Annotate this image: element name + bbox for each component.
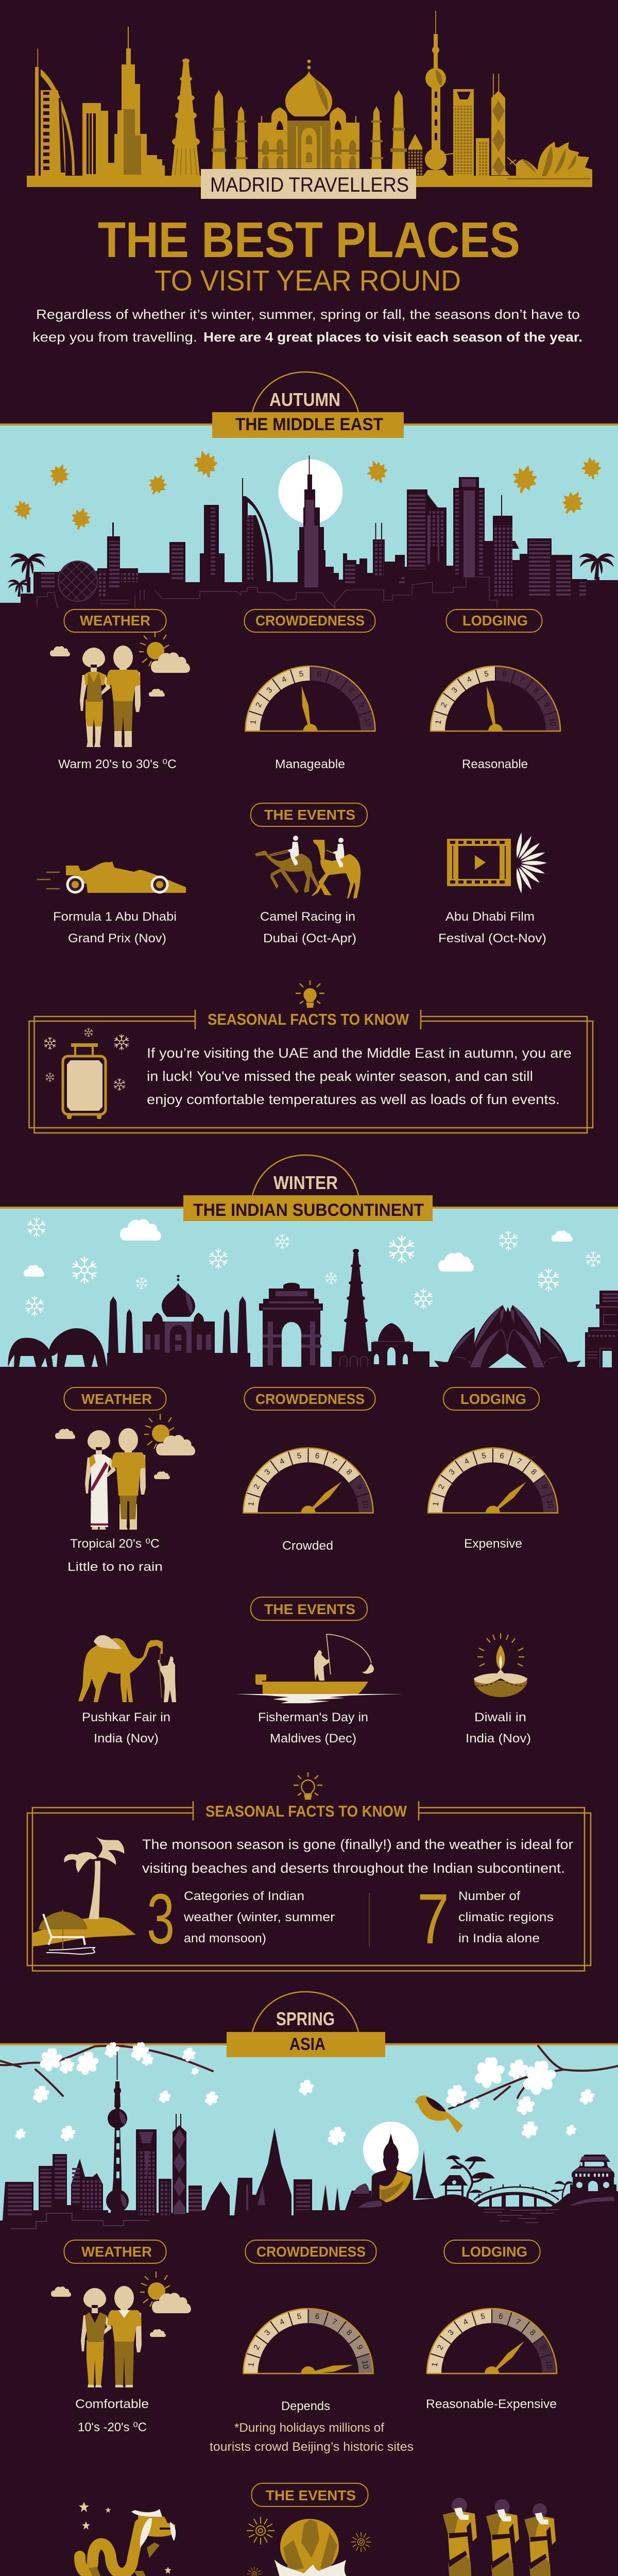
gauge: crowdedness 8: 7: [331, 1456, 338, 1466]
paragraph: enjoy comfortable temperatures as well as loads of fun events.: [147, 1092, 560, 1107]
caption: pushkar: [82, 1710, 170, 1745]
icon: camel racing: [255, 836, 360, 899]
icon: suitcase and snowflakes: [43, 1028, 130, 1119]
stat: 3 categories: Categories of Indian: [184, 1889, 304, 1903]
gauge: lodging 8: 6: [499, 1451, 505, 1461]
caption: film festival: Abu Dhabi Film: [445, 910, 535, 924]
region banner: asia: ASIA: [289, 2035, 325, 2054]
gauge: lodging 8: 2: [437, 1483, 447, 1490]
header skyline: [27, 11, 592, 187]
section: winter: [0, 1154, 618, 1972]
gauge: lodging reasonable to expensive: 10: [544, 2360, 554, 2369]
caption: crowdedness: [210, 2399, 414, 2454]
gauge: lodging reasonable to expensive: 9: [538, 2344, 548, 2351]
caption: diwali: Diwali in: [474, 1710, 526, 1724]
gauge: lodging 5: 7: [518, 675, 525, 685]
landmark: twin slab tower: [82, 103, 114, 176]
season arc: winter: [252, 1155, 358, 1195]
icon: lightbulb outline: [294, 1772, 322, 1799]
gauge: lodging reasonable to expensive: 7: [514, 2317, 522, 2327]
section: autumn: [0, 372, 618, 1133]
caption: diwali: [466, 1710, 531, 1745]
landmark: Taj Mahal minarets: [212, 90, 407, 170]
season arc: autumn: AUTUMN: [269, 389, 340, 410]
landmark: dark Taj Mahal: [107, 1275, 250, 1367]
landmark: lotus temple: [434, 1305, 581, 1368]
gauge: lodging 8: 10: [545, 1499, 555, 1509]
gauge: lodging 8: 7: [515, 1456, 523, 1466]
caption: formula 1: Grand Prix (Nov): [68, 931, 166, 945]
icon: lotus lantern: [247, 2517, 371, 2576]
caption: weather: [67, 1537, 163, 1574]
gauge: lodging 5: 4: [466, 675, 473, 685]
gauge: lodging 5: 2: [439, 701, 449, 709]
caption: formula 1: [53, 910, 177, 945]
caption: fishermans day: Fisherman's Day in: [258, 1710, 368, 1724]
gauge: crowdedness 5: 3: [265, 686, 274, 695]
caption: weather: [75, 2397, 149, 2434]
caption: crowdedness: Manageable: [275, 757, 345, 771]
icon: three monks: [443, 2498, 556, 2576]
icon: golden bird: [415, 2095, 463, 2133]
icon: formula 1 car: [37, 861, 186, 893]
gauge: lodging 5: [431, 666, 560, 731]
gauge: crowdedness 8: 10: [360, 1499, 370, 1509]
pill: weather: WEATHER: [81, 1391, 152, 1407]
animals: elephants: [8, 1328, 107, 1367]
panel: seasonal facts winter: [27, 1801, 591, 1971]
caption: pushkar: Pushkar Fair in: [82, 1710, 170, 1724]
caption: weather: Tropical 20's ⁰C: [70, 1537, 160, 1551]
gauge: lodging reasonable to expensive: 6: [498, 2312, 504, 2321]
gauge: crowdedness 5: 5: [299, 669, 304, 679]
gauge: lodging reasonable to expensive: [427, 2309, 557, 2374]
landmark: Qutub Minar: [171, 59, 200, 176]
gauge: lodging reasonable to expensive: 3: [447, 2328, 456, 2337]
gauge: crowdedness 8: 9: [355, 1483, 365, 1490]
gauge: crowdedness depends: 3: [263, 2328, 272, 2337]
gauge: lodging reasonable to expensive: 4: [462, 2317, 470, 2327]
caption: diwali: India (Nov): [466, 1732, 531, 1745]
caption: film festival: Festival (Oct-Nov): [438, 931, 546, 945]
gauge: lodging 5: 5: [484, 669, 489, 679]
branches with blossoms: [0, 2042, 618, 2115]
title: [98, 212, 520, 297]
caption: weather: Comfortable: [75, 2397, 149, 2411]
gauge: lodging 8: [428, 1448, 558, 1513]
gauge: lodging 8: 5: [481, 1451, 487, 1461]
skyline: middle east: [0, 455, 618, 618]
caption: camel racing: Dubai (Oct-Apr): [263, 931, 356, 945]
stat: 7 climatic regions: Number of: [458, 1889, 520, 1903]
title: TO VISIT YEAR ROUND: [154, 264, 461, 297]
header and autumn section: [0, 11, 618, 1133]
caption: crowdedness: *During holidays millions of: [234, 2421, 384, 2435]
gauge: crowdedness 8: 4: [278, 1456, 286, 1466]
brand banner: [201, 169, 416, 199]
section: spring: [0, 1991, 618, 2576]
caption: weather: Little to no rain: [67, 1560, 163, 1574]
caption: crowdedness: Depends: [281, 2399, 330, 2413]
gauge: crowdedness 8: 5: [297, 1451, 302, 1461]
gauge: lodging 8: 9: [539, 1483, 549, 1490]
falling petals: [15, 2080, 594, 2145]
region banner: asia: [227, 2032, 385, 2057]
pill: weather: [64, 1387, 166, 1410]
gauge: lodging reasonable to expensive: 8: [528, 2328, 537, 2337]
gauge: crowdedness depends: 5: [297, 2312, 302, 2321]
pill: crowdedness: [244, 609, 375, 632]
gauge: crowdedness 8: 3: [263, 1467, 272, 1477]
landmark: Shanghai towers: [408, 11, 518, 176]
landmark: Taj Mahal: [258, 60, 359, 168]
gauge: lodging 5: 3: [450, 686, 459, 695]
caption: crowdedness: Crowded: [282, 1539, 333, 1553]
gauge: crowdedness 5: 4: [280, 675, 288, 685]
pill: crowdedness: [244, 1387, 375, 1410]
caption: lodging: Reasonable-Expensive: [426, 2397, 557, 2411]
region banner: the middle east: THE MIDDLE EAST: [235, 415, 383, 434]
gauge: lodging 5: 1: [434, 719, 443, 725]
gauge: crowdedness 5: 6: [317, 669, 322, 679]
pill: the events: [251, 2483, 368, 2506]
icon: couple in comfortable weather: [51, 2272, 191, 2387]
stat: 3 categories: and monsoon): [184, 1931, 266, 1945]
landmark: Burj Al Arab: [35, 48, 75, 176]
paragraph: visiting beaches and deserts throughout the Indian subcontinent.: [142, 1860, 565, 1876]
panel: seasonal facts autumn: [29, 1010, 593, 1133]
pill: crowdedness: CROWDEDNESS: [255, 1391, 365, 1407]
intro text: Regardless of whether it’s winter, summer, spring or fall, the seasons don’t have to: [36, 307, 580, 322]
caption: camel racing: Camel Racing in: [260, 910, 355, 924]
season arc: spring: SPRING: [276, 2008, 335, 2029]
pill: crowdedness: [245, 2240, 376, 2263]
gauge: crowdedness 5: 8: [347, 686, 356, 695]
gauge: lodging 8: 1: [431, 1501, 440, 1506]
gauge: crowdedness depends: 1: [247, 2362, 256, 2367]
icon: temple: [569, 2155, 616, 2206]
intro text: Here are 4 great places to visit each season of the year.: [203, 329, 582, 345]
icon: bush and stupa: [353, 2150, 434, 2198]
season arc: autumn: [252, 372, 358, 412]
icon: film festival: [447, 832, 547, 894]
gauge: lodging 5: 6: [502, 669, 507, 679]
caption: fishermans day: Maldives (Dec): [270, 1732, 356, 1745]
pill: the events: [251, 1597, 367, 1620]
gauge: lodging 8: 3: [448, 1467, 457, 1477]
pill: the events: THE EVENTS: [264, 807, 355, 823]
caption: lodging: Expensive: [464, 1537, 522, 1551]
gauge: lodging 8: 8: [529, 1467, 538, 1477]
pill: crowdedness: CROWDEDNESS: [255, 613, 365, 629]
gauge: crowdedness depends: 2: [252, 2344, 262, 2351]
paragraph: [147, 1045, 572, 1107]
sky scene: asia: [0, 2042, 618, 2231]
gauge: lodging 8: 4: [463, 1456, 471, 1466]
icon: arched bridge and water: [474, 2184, 559, 2223]
gauge: crowdedness 8: 2: [252, 1483, 262, 1490]
landmark: right edge building: [585, 1291, 618, 1367]
paragraph: The monsoon season is gone (finally!) and the weather is ideal for: [142, 1837, 573, 1852]
stat: 7 climatic regions: 7: [417, 1879, 449, 1959]
caption: weather: Warm 20's to 30's ⁰C: [58, 757, 177, 771]
gauge: crowdedness 8: 1: [247, 1501, 256, 1506]
pill: crowdedness: CROWDEDNESS: [256, 2244, 366, 2260]
caption: pushkar: India (Nov): [94, 1732, 159, 1745]
skyline: asia: [0, 2052, 618, 2231]
gauge: lodging 5: 9: [542, 701, 552, 709]
pill: the events: [251, 803, 367, 826]
region banner: indian subcontinent: THE INDIAN SUBCONTINENT: [193, 1200, 424, 1220]
stat: 7 climatic regions: in India alone: [458, 1931, 540, 1945]
gauge: crowdedness 8: 8: [345, 1467, 354, 1477]
stat: 3 categories: 3: [147, 1879, 175, 1959]
landmark: tomb: [332, 1323, 430, 1367]
paragraph: If you’re visiting the UAE and the Middle East in autumn, you are: [147, 1045, 572, 1061]
region banner: the middle east: [212, 412, 404, 438]
gauge: lodging reasonable to expensive: 1: [430, 2362, 439, 2367]
heading: SEASONAL FACTS TO KNOW: [208, 1010, 409, 1028]
icon: pushkar camel and handler: [78, 1635, 176, 1702]
caption: formula 1: Formula 1 Abu Dhabi: [53, 910, 177, 924]
pill: lodging: LODGING: [460, 1391, 526, 1407]
brand banner: MADRID TRAVELLERS: [210, 174, 409, 196]
gauge: crowdedness depends: 7: [331, 2317, 338, 2327]
stat: 7 climatic regions: [417, 1879, 554, 1959]
gauge: crowdedness depends: 9: [355, 2344, 365, 2351]
landmark: Qutub Minar dark: [343, 1249, 369, 1355]
gauge: crowdedness 5: 2: [254, 701, 264, 709]
pill: weather: WEATHER: [80, 613, 150, 629]
caption: camel racing: [260, 910, 356, 945]
intro text: [32, 307, 582, 345]
gauge: crowdedness 8: [243, 1448, 373, 1513]
gauge: crowdedness 5: 7: [333, 675, 340, 685]
gauge: lodging reasonable to expensive: 2: [436, 2344, 445, 2351]
skyline: india: [0, 1249, 618, 1370]
icon: seated Buddha: [358, 2133, 413, 2208]
caption: lodging: Reasonable: [462, 757, 528, 771]
icon: golden dragon: [79, 2502, 176, 2576]
gauge: crowdedness depends: 4: [278, 2317, 286, 2327]
paragraph: in luck! You've missed the peak winter season, and can still: [147, 1069, 533, 1084]
heading: SEASONAL FACTS TO KNOW: [205, 1802, 407, 1820]
season arc: spring: [252, 1992, 358, 2032]
landmark: Burj Khalifa: [111, 27, 165, 176]
gauge: lodging 5: 8: [531, 686, 541, 695]
icon: fisherman on boat: [235, 1634, 403, 1703]
gauge: lodging reasonable to expensive: 5: [480, 2312, 486, 2321]
pill: weather: [64, 2240, 166, 2263]
pill: the events: THE EVENTS: [266, 2487, 356, 2503]
pill: lodging: [443, 1387, 539, 1410]
sky scene: middle east: [0, 423, 618, 618]
caption: fishermans day: [258, 1710, 368, 1745]
pill: lodging: LODGING: [461, 2244, 527, 2260]
season arc: winter: WINTER: [273, 1172, 338, 1193]
gauge: crowdedness 5: 10: [362, 717, 372, 727]
pill: lodging: LODGING: [462, 613, 528, 629]
icon: island with palm and lounge chair: [32, 1837, 136, 1954]
landmark: Sydney Opera House: [507, 142, 592, 179]
icon: couple in warm weather: [50, 631, 190, 747]
pill: weather: [64, 609, 166, 632]
stat: 3 categories: [147, 1879, 335, 1959]
landmark: India Gate: [259, 1283, 323, 1368]
caption: weather: 10's -20's ⁰C: [78, 2420, 147, 2434]
title: THE BEST PLACES: [98, 212, 520, 268]
gauge: crowdedness 5: 1: [249, 719, 258, 725]
gauge: crowdedness depends: 8: [345, 2328, 354, 2337]
icon: pavilion and bonsai trees: [439, 2156, 573, 2200]
pill: weather: WEATHER: [81, 2244, 152, 2260]
gauge: crowdedness depends: 6: [315, 2312, 320, 2321]
caption: film festival: [438, 910, 546, 945]
stat: 3 categories: weather (winter, summer: [183, 1910, 335, 1924]
gauge: lodging 5: 10: [547, 717, 557, 727]
stat: 7 climatic regions: climatic regions: [458, 1910, 554, 1924]
gauge: crowdedness 5: [245, 666, 375, 731]
pill: the events: THE EVENTS: [264, 1601, 355, 1617]
gauge: crowdedness 8: 6: [315, 1451, 320, 1461]
paragraph: [142, 1837, 573, 1876]
pill: lodging: [446, 609, 542, 632]
gauge: crowdedness depends: [243, 2309, 373, 2376]
icon: couple in tropical weather: [55, 1414, 195, 1530]
icon: diwali lamp: [474, 1633, 527, 1697]
sky scene: indian subcontinent: [0, 1207, 618, 1370]
gauge: crowdedness 5: 9: [357, 701, 367, 709]
intro text: keep you from travelling.: [32, 329, 197, 345]
pill: lodging: [444, 2240, 540, 2263]
caption: crowdedness: tourists crowd Beijing’s historic sites: [210, 2440, 414, 2454]
gauge: crowdedness depends: 10: [360, 2360, 370, 2369]
icon: lightbulb filled: [296, 980, 324, 1007]
